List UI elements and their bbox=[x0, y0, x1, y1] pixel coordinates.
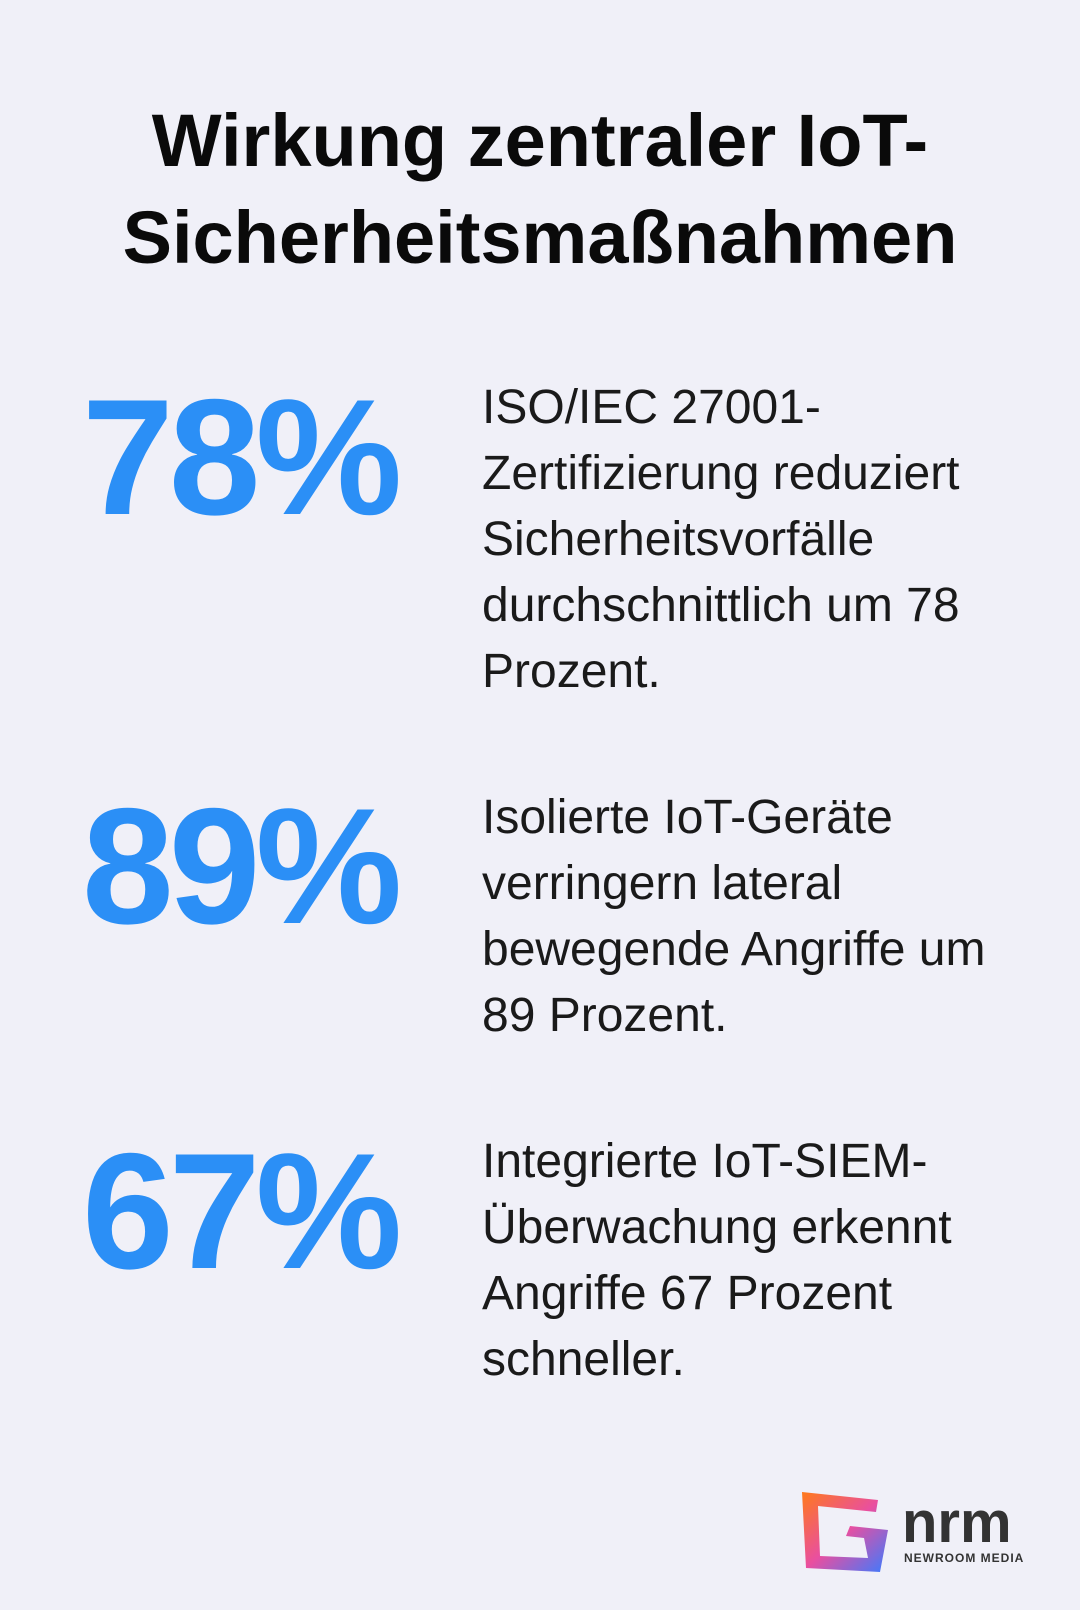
stat 1 text: Sicherheitsvorfälle bbox=[482, 513, 874, 566]
title: Wirkung zentraler IoT- bbox=[152, 99, 928, 182]
stat 1 text bbox=[482, 381, 960, 698]
stat 2 text bbox=[482, 791, 985, 1042]
stat 2 text: bewegende Angriffe um bbox=[482, 923, 985, 976]
stat 1 text: Zertifizierung reduziert bbox=[482, 447, 960, 500]
logo: nrm bbox=[902, 1490, 1012, 1555]
logo bbox=[802, 1490, 1024, 1572]
title bbox=[123, 99, 957, 279]
stat 1 number: 78% bbox=[82, 365, 397, 549]
stat 1 text: ISO/IEC 27001- bbox=[482, 381, 821, 434]
stat 3 text bbox=[482, 1135, 952, 1386]
stat 3 text: Angriffe 67 Prozent bbox=[482, 1267, 892, 1320]
stat 2 number: 89% bbox=[82, 774, 397, 958]
title: Sicherheitsmaßnahmen bbox=[123, 196, 957, 279]
stat 2 text: Isolierte IoT-Geräte bbox=[482, 791, 893, 844]
stat 1 text: Prozent. bbox=[482, 645, 661, 698]
stat 1 text: durchschnittlich um 78 bbox=[482, 579, 960, 632]
logo: NEWROOM MEDIA bbox=[904, 1551, 1024, 1565]
stat 2 text: 89 Prozent. bbox=[482, 989, 727, 1042]
stat 2 text: verringern lateral bbox=[482, 857, 842, 910]
stat 3 text: Integrierte IoT-SIEM- bbox=[482, 1135, 927, 1188]
stat 3 number: 67% bbox=[82, 1119, 397, 1303]
stat 3 text: Überwachung erkennt bbox=[482, 1201, 952, 1254]
stat 3 text: schneller. bbox=[482, 1333, 685, 1386]
